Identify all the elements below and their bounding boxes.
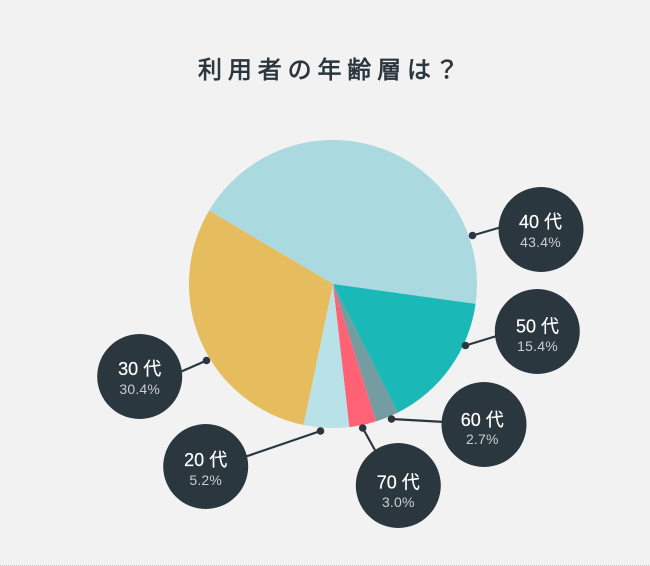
callout: 50s: [462, 289, 580, 374]
callout: 20s: 20 代: [184, 450, 227, 470]
slice: 30s: [189, 211, 333, 425]
callout: 40s: 40 代: [519, 212, 562, 232]
pie chart: [189, 140, 477, 428]
callout: 60s: [388, 382, 526, 467]
callout: 60s: 60 代: [461, 410, 504, 430]
callout: 70s: 70 代: [377, 472, 420, 492]
callout: 70s: [356, 424, 441, 528]
callout: 60s: 2.7%: [466, 431, 499, 447]
callout: 20s: [163, 424, 324, 509]
callout: 50s: 50 代: [516, 316, 559, 336]
callout: 30s: [97, 334, 210, 419]
callout: 50s: 15.4%: [517, 338, 558, 354]
slice: 40s: [209, 140, 477, 304]
slice: 20s: [304, 284, 349, 428]
callout: 30s: 30 代: [118, 359, 161, 379]
slice: 60s: [333, 284, 398, 421]
callout: 40s: [469, 187, 584, 272]
slice: 70s: [333, 284, 376, 427]
slice: 50s: [333, 284, 476, 413]
callout: 70s: 3.0%: [382, 494, 415, 510]
callout: 30s: 30.4%: [119, 381, 160, 397]
title: 利用者の年齢層は？: [198, 57, 465, 84]
callout: 20s: 5.2%: [189, 472, 222, 488]
callout: 40s: 43.4%: [520, 234, 561, 250]
